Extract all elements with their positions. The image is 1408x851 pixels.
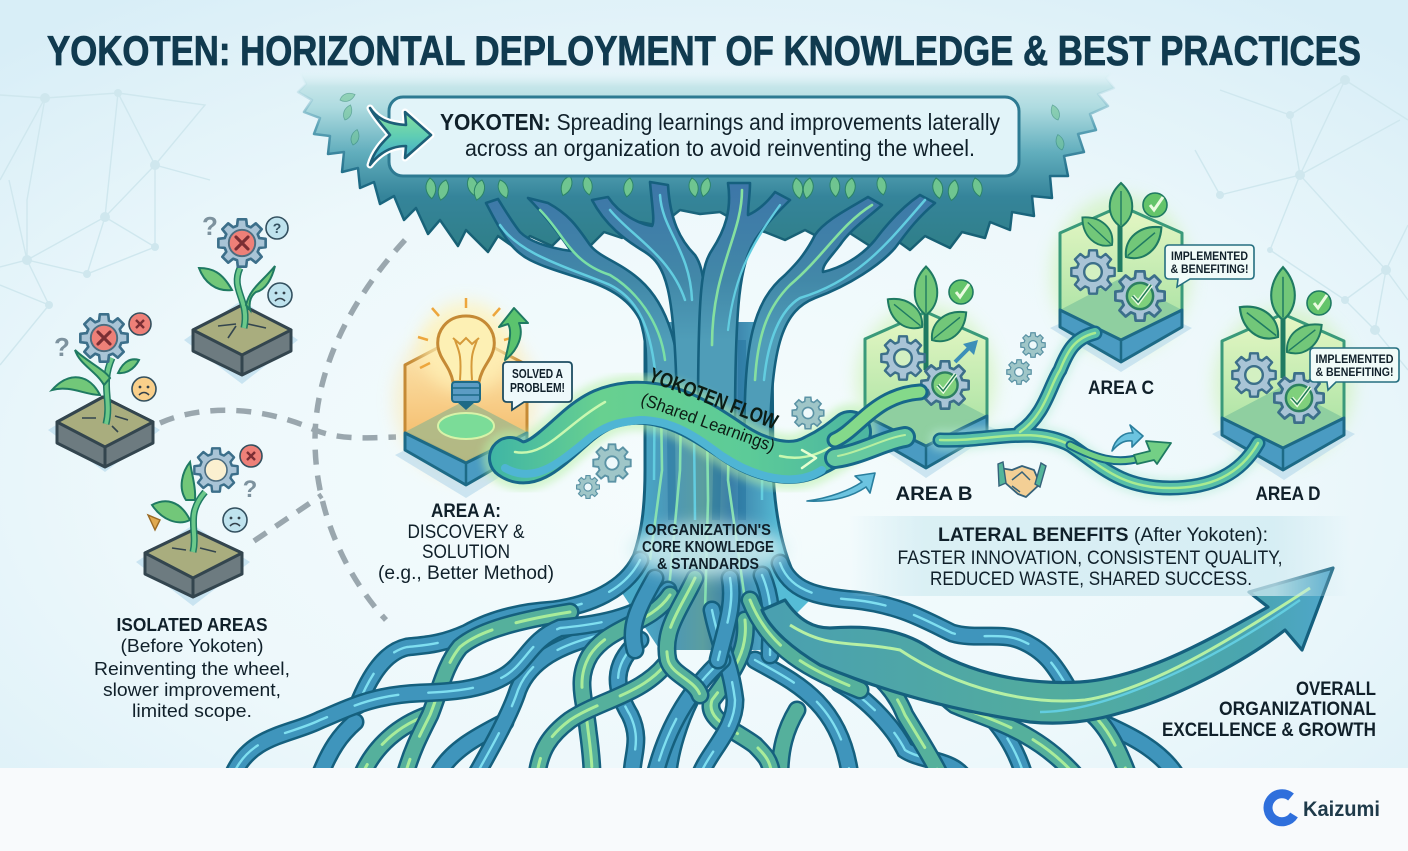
plant xyxy=(1280,310,1286,378)
gear xyxy=(194,448,238,492)
area a block xyxy=(394,298,538,498)
area b block xyxy=(855,267,998,478)
area labels: AREA C xyxy=(1088,377,1154,399)
area a label xyxy=(378,500,554,584)
x badge xyxy=(129,313,151,335)
flow ribbon xyxy=(505,333,1258,488)
lateral benefits panel: FASTER INNOVATION, CONSISTENT QUALITY, xyxy=(898,547,1282,569)
solved a problem callout xyxy=(503,362,572,410)
branch highlights xyxy=(500,190,925,380)
footer band xyxy=(0,768,1408,851)
gear x xyxy=(218,219,266,267)
overall excellence label: EXCELLENCE & GROWTH xyxy=(1162,719,1376,741)
canopy leaves xyxy=(339,91,1066,201)
soil block xyxy=(136,525,250,606)
sad face xyxy=(223,508,247,532)
isolated plant 2 xyxy=(184,211,298,384)
callout xyxy=(1165,245,1254,287)
gears xyxy=(1071,250,1115,294)
lateral flow lines to c and d xyxy=(940,333,1258,488)
callout: & BENEFITING! xyxy=(1316,367,1394,379)
definition text: YOKOTEN: Spreading learnings and improvements laterally xyxy=(440,109,1000,135)
plant xyxy=(924,310,928,370)
stem and leaves xyxy=(106,358,112,424)
callout: & BENEFITING! xyxy=(1170,264,1248,276)
question mark: ? xyxy=(54,332,70,362)
right fork xyxy=(745,195,935,450)
isolated areas caption: (Before Yokoten) xyxy=(120,635,264,656)
callout xyxy=(1310,348,1399,390)
icon: light bulb xyxy=(418,298,514,410)
lateral benefits panel: REDUCED WASTE, SHARED SUCCESS. xyxy=(930,568,1252,590)
overall growth arrow xyxy=(762,568,1333,723)
stem and leaves xyxy=(237,268,245,328)
dashed connectors xyxy=(160,240,405,620)
question mark: ? xyxy=(243,476,257,503)
check badge xyxy=(1307,291,1331,315)
icon: green up arrow xyxy=(499,308,528,360)
help badge: ? xyxy=(273,220,281,236)
gears xyxy=(1232,353,1276,397)
sad face xyxy=(268,283,292,307)
icon: handshake xyxy=(998,462,1046,497)
check badge xyxy=(1143,193,1167,217)
callout: IMPLEMENTED xyxy=(1171,251,1248,263)
small blue curved arrow xyxy=(1112,425,1143,451)
yokoten flow label: YOKOTEN FLOW xyxy=(646,364,781,434)
definition text xyxy=(440,109,1000,161)
core knowledge label xyxy=(642,522,774,573)
area labels: AREA B xyxy=(896,483,972,505)
isolated areas caption: Reinventing the wheel, xyxy=(94,658,290,679)
soil block xyxy=(184,300,298,384)
tree: canopy, branches, trunk, roots xyxy=(233,72,1333,775)
main flow xyxy=(510,403,850,462)
area labels: AREA D xyxy=(1256,483,1320,505)
lateral benefits panel: LATERAL BENEFITS (After Yokoten): xyxy=(938,524,1268,546)
area labels xyxy=(378,377,1320,584)
area c block xyxy=(1050,183,1254,372)
canopy xyxy=(298,72,1114,252)
core knowledge label: CORE KNOWLEDGE xyxy=(642,539,774,556)
plant xyxy=(1118,205,1122,272)
definition text: across an organization to avoid reinventing the wheel. xyxy=(465,135,975,161)
arrow head to area d xyxy=(1134,441,1171,464)
overall excellence label: OVERALL xyxy=(1296,678,1376,700)
decorative gears icons xyxy=(577,333,1045,498)
area a label: AREA A: xyxy=(431,500,501,522)
branch to area b xyxy=(835,392,920,440)
overall excellence label: ORGANIZATIONAL xyxy=(1219,698,1376,720)
definition box xyxy=(370,97,1019,176)
network pattern left xyxy=(0,89,210,365)
network pattern right xyxy=(1195,75,1408,370)
logo: Kaizumi xyxy=(1303,798,1380,821)
icon: definition arrow xyxy=(370,108,431,165)
roots xyxy=(233,560,1176,775)
soft halo behind core text xyxy=(630,524,786,576)
solved a problem callout: SOLVED A xyxy=(512,367,563,381)
isolated areas caption: limited scope. xyxy=(132,700,252,721)
gear x xyxy=(80,314,128,362)
stem and leaves xyxy=(193,492,205,552)
logo xyxy=(1268,794,1380,822)
blue sweep arrow xyxy=(807,473,875,501)
glow xyxy=(510,403,850,462)
gears xyxy=(881,336,925,380)
callout: IMPLEMENTED xyxy=(1316,354,1394,366)
sad face xyxy=(132,377,156,401)
help badge xyxy=(266,217,288,239)
left fork xyxy=(484,196,674,386)
x badge xyxy=(240,445,262,467)
overall excellence label xyxy=(1162,678,1376,741)
area d block xyxy=(1212,267,1399,480)
area a label: DISCOVERY & xyxy=(408,521,524,543)
icon: kaizumi mark xyxy=(1268,794,1294,822)
question mark: ? xyxy=(202,211,218,241)
yokoten flow label: (Shared Learnings) xyxy=(638,389,778,456)
isolated areas caption xyxy=(94,614,290,721)
isolated areas caption: ISOLATED AREAS xyxy=(116,614,268,635)
area a label: (e.g., Better Method) xyxy=(378,562,554,584)
trend arrow xyxy=(955,345,972,362)
isolated plant 3 xyxy=(136,445,262,606)
core knowledge label: ORGANIZATION'S xyxy=(645,522,771,539)
area a label: SOLUTION xyxy=(422,541,510,563)
soil block xyxy=(48,395,160,472)
check badge xyxy=(949,280,973,304)
isolated plant 1 xyxy=(48,313,160,472)
isolated areas caption: slower improvement, xyxy=(103,679,281,700)
core knowledge label: & STANDARDS xyxy=(657,556,759,573)
trunk xyxy=(620,322,810,650)
center-right fork xyxy=(698,183,790,430)
branches xyxy=(486,182,935,450)
lateral benefits panel xyxy=(850,516,1350,596)
solved a problem callout: PROBLEM! xyxy=(510,381,565,395)
center-left fork xyxy=(592,182,706,410)
